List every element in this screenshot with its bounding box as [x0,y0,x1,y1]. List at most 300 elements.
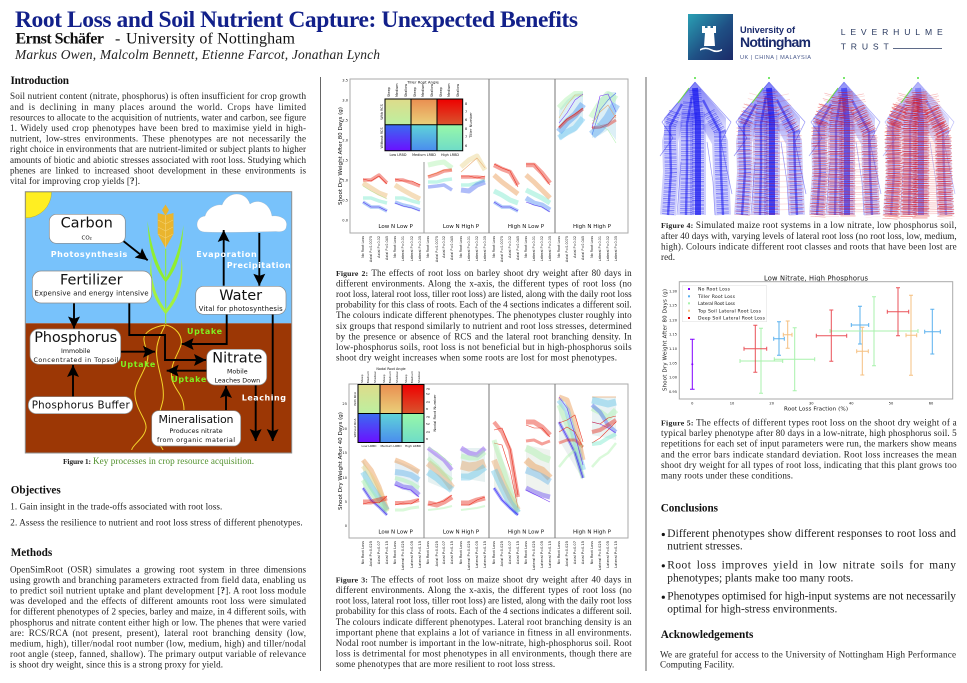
inset heat map: tiller root angle by LRBD and RCS [380,80,473,157]
caption: figure 2: Figure 2: The effects of root loss on barley shoot dry weight after 80 days in [336,268,632,278]
process labels: Evaporation [196,250,257,259]
title: Root Loss and Soil Nutrient Capture: Unexpected Benefits [15,7,578,33]
legend: Top Soil Lateral Root Loss [697,308,762,314]
y axis: 0.5 [342,198,348,202]
caption: figure 4: red. [661,252,675,262]
caption: figure 4: after 40 days with, varying levels of lateral root loss (no root loss, low, medium, [661,231,957,241]
x axis labels: Axial P=0.0075 [500,236,504,262]
box: fertilizer: Expensive and energy intensive [34,290,148,298]
heat map labels: 6 [465,118,467,122]
y axis [669,289,678,394]
x axis labels: Axial P=0.0075 [369,236,373,262]
caption: figure 4: Figure 4: Simulated maize root systems in a low nitrate, low phosphorus soil, [661,220,957,230]
caption: figure 2: The colours indicate different phenotypes. The phenotypes cluster roughly into [336,310,632,320]
process labels: Photosynthesis [51,250,128,259]
error bars: top soil lateral root loss [783,295,917,375]
x axis labels: No Root Loss [524,236,528,258]
box: mineralisation: Mineralisation [158,413,234,426]
caption: figure 5: and the error bars indicate standard deviation. Root loss increases the mean [661,449,957,459]
y axis [342,78,349,222]
box: nitrate [207,349,267,385]
box: phosphorus: Concentrated in Topsoil [34,357,119,364]
text block: methods: OpenSimRoot (OSR) simulates a growing root system in three dimensions [10,564,306,574]
caption: figure 3: Figure 3: The effects of root loss on maize shoot dry weight after 40 days in [336,574,632,584]
x axis labels: Axial P=0.025 [565,541,569,566]
x axis labels: Axial P=0.025 [500,541,504,566]
legend: Lateral Root Loss [698,301,736,307]
heat map labels: Medium [395,83,399,97]
section labels: Low N High P [443,224,480,230]
caption: figure 3: loss is detrimental for most phenotypes in all environments, though there are [336,649,632,659]
text block: methods [10,564,306,670]
text block: introduction: vital for improving crop yields [?]. [10,176,140,186]
box: carbon: Carbon [61,216,113,232]
y axis: 1.10 [669,347,678,351]
y axis: 2.5 [342,118,348,122]
heat map labels: Low LRBD [362,444,377,448]
x axis labels: Axial P=0.15 [450,541,454,564]
legend: Deep Soil Lateral Root Loss [698,316,766,322]
box: fertilizer: Fertilizer [60,272,123,288]
y axis: 1.5 [342,158,348,162]
caption: figure 5: repetitions for each set of input parameters were run, the markers show means [661,439,957,449]
roots [132,325,184,450]
x axis: 10 [730,402,735,406]
text block: methods: for different phenotypes of 2 species, barley and maize, in 4 different soils, with [10,607,306,617]
x axis labels: Axial P=0.045 [450,236,454,260]
x axis: 0 [691,402,694,406]
x axis labels: No Root Loss [426,236,430,258]
icon: wheat plant [148,204,184,324]
heat map labels: Medium [366,371,370,383]
y axis: 1.00 [669,376,678,380]
process labels: Uptake [187,327,223,336]
process labels: Precipitation [227,261,291,270]
figure 5: error bar chart [662,274,953,412]
y axis: 1.30 [669,289,678,293]
heat map labels: Shallow [456,84,460,97]
caption: figure 5: typical barley phenotype after 80 days in a low-nitrate, high phosphorus soil. 5 [661,428,957,438]
x axis labels: No Root Loss [590,236,594,258]
box: phosphorus buffer: Phosphorus Buffer [32,400,130,412]
text block: introduction: nutrient, low-stres environments. These phenotypes are not necessarily the [10,134,306,144]
x axis labels: Lateral P=0.025 [532,541,536,570]
x axis labels: Lateral P=0.01 [467,236,471,261]
section labels: High N High P [573,224,612,230]
y axis: 3.5 [342,78,348,82]
box: carbon: CO₂ [82,236,92,242]
section labels: High N Low P [508,224,545,230]
process labels: Uptake [171,375,207,384]
text block: introduction: 1. Widely used crop phenotypes have been bred to maximise yield in high- [10,123,306,133]
x axis labels: Axial P=0.15 [516,541,520,564]
root system: medium root loss [809,77,881,217]
list: conclusions: Different phenotypes show different responses to root loss and [667,528,956,540]
caption: figure 3: The colours indicate different phenotypes. Lateral root branching density is an [336,617,632,627]
heat map labels: Medium [421,83,425,97]
box: phosphorus [30,329,121,364]
box: water [196,286,286,314]
caption: figure 2: different environments. Along the x-axis, the different types of root loss (no [336,278,632,288]
x axis title: Root Loss Fraction (%) [784,406,848,412]
box: mineralisation [152,411,241,446]
caption: figure 2: root loss, lateral root loss, tiller root loss) are listed, along with the daily root loss [336,289,632,299]
author and affiliation: University of Nottingham [126,30,296,48]
box: water: Vital for photosynthesis [199,305,283,313]
y axis: 15 [342,451,347,455]
x axis labels: Lateral P=0.01 [598,236,602,261]
list: objectives [10,502,303,527]
heat map labels: Shallow [417,371,421,383]
x axis labels: No Root Loss [492,541,496,564]
y axis: 10 [342,476,348,480]
x axis: 50 [889,402,894,406]
x axis: 60 [929,402,934,406]
text block: introduction [10,91,306,186]
heat map labels: 8 [426,437,428,441]
heat map labels: Tiller Number [468,112,473,139]
logo: Leverhulme Trust [841,27,943,52]
heat map labels: Medium LRBD [412,153,436,157]
x axis labels: No Root Loss [361,236,365,258]
heat map labels [353,367,437,448]
icon: cloud [197,194,287,232]
heading: Conclusions: Conclusions [661,503,719,515]
y axis: 1.25 [669,304,677,308]
text block: introduction: resources to allocate to the acquisition of nutrients, water and carbon, see figure [10,112,306,122]
caption: figure 3: some phenotypes that are more resilient to root loss stress. [336,659,555,669]
caption: figure 2: shoot dry weight increases when some roots are lost for most phenotypes. [336,353,617,363]
x axis labels: Lateral P=0.05 [483,236,487,261]
x axis labels: Axial P=0.15 [581,541,585,564]
x axis labels [361,236,618,262]
logo: University of Nottingham: University of [740,25,796,35]
heat map labels: 6 [465,144,467,148]
x axis labels: Lateral P=0.025 [467,541,471,570]
heat map labels: 52 [426,392,430,396]
text block: acknowledgements: Computing Facility. [660,660,734,670]
heading: Acknowledgements: Acknowledgements [661,629,754,641]
text block: methods: using growth and branching parameters extracted from field data, enabling us [10,575,306,585]
text block: introduction: phenes are linked to increased shoot development in these environments is [10,165,306,175]
x axis labels: Axial P=0.02 [573,236,577,258]
box: nitrate: Mobile [227,368,248,376]
error bars: tiller root loss [774,306,940,355]
x axis labels: Lateral P=0.15 [614,541,618,568]
heat map labels: Medium [447,83,451,97]
heat map labels: Medium LRBD [380,444,402,448]
y axis title: Shoot Dry Weight After 40 Days (g) [338,412,344,510]
text block: introduction: and is declining in many places around the world. Crops have limited [10,102,306,112]
x axis labels: Lateral P=0.05 [418,236,422,261]
heat map labels: Medium [410,371,414,383]
heat map labels: Nodal Root Number [432,394,437,432]
caption: figure 2 [336,268,632,363]
x axis labels: Axial P=0.02 [442,236,446,258]
x axis labels: Axial P=0.0075 [435,236,439,262]
caption: figure 2: low-phosphorus soils, root loss is not beneficial but in high-phosphorus soils [336,342,632,352]
heat map labels: 24 [426,430,430,434]
x axis labels: No Root Loss [557,236,561,258]
caption: figure 4 [661,220,957,262]
list: conclusions: Root loss improves yield in low nitrate soils for many [667,559,956,571]
y axis title: Shoot Dry Weight After 80 Days (g) [662,289,668,391]
plot frame [350,79,628,233]
text block: acknowledgements: We are grateful for access to the University of Nottingham High Performance [660,649,956,659]
box: carbon [49,214,125,243]
heat map labels: Shallow [373,371,377,383]
text block: introduction: Soil nutrient content (nitrate, phosphorus) is often insufficient for crop growth [10,91,306,101]
heat map labels: 7 [465,110,467,114]
y axis: 5 [345,500,347,504]
x axis labels: Axial P=0.045 [516,236,520,260]
y axis: 2.0 [342,138,349,142]
heat map labels: 8 [465,127,467,131]
heat map labels: Shallow [404,84,408,97]
heat map labels: Steep [382,374,386,383]
x axis labels: No Root Loss [459,236,463,258]
text block: methods: phosphorus and nitrate content either high or low. The phenes that were varied [10,617,306,627]
x axis [691,402,934,406]
y axis: 1.0 [342,178,349,182]
box: phosphorus: Immobile [61,348,90,355]
x axis labels: Lateral P=0.15 [483,541,487,568]
logo: University of Nottingham: Nottingham [740,34,811,50]
error bars: no root loss [690,339,695,389]
list: conclusions [662,528,956,615]
y axis: 1.20 [669,318,678,322]
x axis labels: No Root Loss [393,541,397,564]
heading: Methods: Methods [11,547,53,559]
y axis: 20 [342,427,348,431]
caption: figure 2: six groups that respond similarly to nutrient and root loss stresses, determined [336,321,632,331]
y axis [342,402,348,528]
x axis labels: Lateral P=0.05 [614,236,618,261]
x axis labels: No Root Loss [393,236,397,258]
y axis: 0.0 [342,218,349,222]
figure 4: simulated maize root systems [660,77,955,219]
section labels: Low N Low P [378,224,413,230]
heat map labels: High LRBD [405,444,422,448]
box: phosphorus: Phosphorus [34,330,117,346]
caption: figure 5 [661,418,957,480]
logo: Leverhulme Trust: TRUST [841,42,889,52]
caption: figure 3: Nodal root number is important in the low-nitrate, high-phosphorus soil. Root [336,638,632,648]
x axis labels: Lateral P=0.02 [410,236,414,261]
x axis labels: Lateral P=0.05 [475,541,479,568]
error bars: deep soil lateral root loss [744,288,909,372]
caption: figure 5: Figure 5: The effects of different types root loss on the shoot dry weight of a [661,418,957,428]
heat map labels: Shallow [395,371,399,383]
x axis labels: No Root Loss [361,541,365,564]
text block: methods: are: RCS/RCA (not present, present), lateral root branching density (low, [10,628,306,638]
root system: high root loss [883,77,955,219]
list: objectives: 2. Assess the resilience to nutrient and root loss stress of different phenotypes. [10,517,303,527]
text block: methods: was developed and the effects of different amounts root loss were simulated [10,596,306,606]
process labels: Uptake [120,360,156,369]
heat map labels: Without RCA [353,418,357,437]
heading: Introduction: Introduction [10,75,70,87]
x axis labels: Axial P=0.0075 [565,236,569,262]
section labels: Low N High P [443,530,480,536]
x axis labels: No Root Loss [492,236,496,258]
box: phosphorus buffer [28,397,133,414]
heat map labels [380,80,473,157]
x axis: 20 [769,402,775,406]
phenotype spread shading [363,397,616,515]
x axis labels: Lateral P=0.05 [410,541,414,568]
heat map labels: Steep [387,87,391,97]
y axis: 1.05 [669,361,677,365]
lines: low N high P [428,156,485,191]
heat map labels: 8 [426,407,428,411]
x axis labels: Axial P=0.045 [581,236,585,260]
heading: Objectives: Objectives [11,484,61,496]
soil [25,323,292,453]
caption: figure 3: different environments. Along the x-axis, the different types of root loss (no [336,585,632,595]
heat map labels: Low LRBD [390,153,407,157]
section labels: Low N Low P [378,530,413,536]
box: mineralisation: Produces nitrate [169,427,223,435]
caption: figure 3: probability for this class of roots. Each of the 4 sections indicates a different soil. [336,606,632,616]
caption: figure 3: root loss, lateral root loss, tiller root loss) are listed, along with the daily root loss [336,596,632,606]
x axis labels: Lateral P=0.05 [540,541,544,568]
list: objectives: 1. Gain insight in the trade-offs associated with root loss. [10,502,222,512]
text block: methods: root angle (steep, fanned, shallow). The primary output variable of relevance [10,649,306,659]
text block: methods: to predict soil nutrient uptake and plant development [?]. A root loss module [10,586,306,596]
x axis labels: Axial P=0.02 [377,236,381,258]
heat map labels: 24 [426,400,430,404]
heat map labels: With RCA [353,391,357,406]
text block: introduction: right choice in environments that are nutrient-limited or subject plants to higher [10,144,306,154]
lines: high N low P [494,422,550,515]
heat map labels: 70 [426,387,430,391]
heat map labels: Nodal Root Angle [376,367,406,371]
x axis labels: Lateral P=0.025 [598,541,602,570]
lines: high N low P [494,164,550,212]
icon: sun [26,192,52,218]
heat map labels: Tiller Root Angle [406,80,440,84]
heat map labels: With RCS [380,104,384,120]
x axis labels: Lateral P=0.01 [401,236,405,261]
heat map labels: 52 [426,422,430,426]
x axis labels: Axial P=0.07 [508,541,512,564]
logo: University of Nottingham [688,14,811,61]
y axis: 25 [342,402,347,406]
legend: No Root Loss [698,287,731,293]
heat map labels: 7 [465,135,467,139]
logo: University of Nottingham: UK | CHINA | MALAYSIA [740,55,811,61]
author and affiliation: Ernst Schäfer [16,30,104,48]
heat map labels: 70 [426,415,430,419]
heat map labels: Without RCS [380,127,384,149]
x axis labels: Lateral P=0.02 [606,236,610,261]
section labels: High N High P [573,530,612,536]
list: conclusions: phenotypes; plants make too many roots. [667,572,853,584]
lines: low N low P [363,460,419,515]
root system: no root loss [660,77,732,215]
heat map labels: Steep [413,87,417,97]
section labels [378,530,612,536]
text block: acknowledgements [660,649,956,670]
lines: high N high P [559,92,616,143]
x axis: 40 [849,402,854,406]
box: fertilizer [32,271,152,303]
error bars: lateral root loss [740,297,918,393]
x axis labels: Lateral P=0.15 [418,541,422,568]
heat map labels: Shallow [430,84,434,97]
plot frame [679,282,953,399]
y axis: 0 [345,524,348,528]
caption: figure 3 [336,574,632,669]
lines: low N high P [428,447,485,510]
lines: low N low P [363,175,420,211]
legend: Tiller Root Loss [697,294,736,300]
figure 3: maize shoot dry weight chart [338,367,628,570]
y axis: 3.0 [342,98,349,102]
box: water: Water [219,288,262,304]
section labels [378,224,612,230]
caption: figure 4: high). Colours indicate different root classes and roots that have been lost are [661,241,957,251]
x axis labels: Lateral P=0.02 [475,236,479,261]
x axis labels: No Root Loss [459,541,463,564]
heat map labels: Steep [439,87,443,97]
x axis labels: Axial P=0.025 [369,541,373,566]
logo: Leverhulme Trust: LEVERHULME [841,27,943,37]
heat map labels: High LRBD [441,153,459,157]
text block: methods: is shoot dry weight, since this is a strong proxy for yield. [10,660,223,670]
text block: introduction: amounts of biotic and abiotic stresses associated with root loss. Studying which [10,155,306,165]
figure 1: crop resource acquisition diagram [25,192,292,453]
caption: figure 1: Figure 1: [63,457,91,466]
box: nitrate: Nitrate [212,350,262,366]
x axis labels: Axial P=0.025 [435,541,439,566]
root system: low root loss [734,77,806,215]
box: mineralisation: from organic material [157,436,235,444]
arrows [73,230,273,441]
x axis labels: Lateral P=0.05 [606,541,610,568]
co-authors: Markus Owen, Malcolm Bennett, Etienne Farcot, Jonathan Lynch [14,47,380,62]
list: conclusions: optimal for high-stress environments. [667,603,837,615]
y axis: 0.95 [669,390,677,394]
x axis labels: Axial P=0.045 [385,236,389,260]
caption: figure 2: by the presence or absence of RCS and the lateral root branching density. In [336,331,632,341]
y axis title: Shoot Dry Weight After 80 Days (g) [338,107,344,205]
caption: figure 2: probability for this class of roots. Each of the 4 sections indicates a different soil. [336,300,632,310]
heat map labels: Steep [360,374,364,383]
x axis labels: No Root Loss [524,541,528,564]
plot frame [349,384,628,538]
sky [25,192,292,323]
inset heat map: nodal root angle by LRBD and RCA [353,367,437,448]
box: nitrate: Leaches Down [215,378,260,384]
x axis labels: No Root Loss [426,541,430,564]
process labels [51,250,291,402]
x axis labels: Axial P=0.07 [573,541,577,564]
heat map labels: 8 [465,102,467,106]
section labels: High N Low P [508,530,545,536]
caption: figure 5: many roots under these conditions. [661,470,793,480]
list: conclusions: Phenotypes optimised for high-input systems are not necessarily [667,591,956,603]
x axis labels: Lateral P=0.02 [540,236,544,261]
heat map labels: Medium [388,371,392,383]
figure 2: barley shoot dry weight chart [338,78,628,262]
x axis labels: No Root Loss [590,541,594,564]
text block: methods: medium, high), tiller/nodal root number (low, medium, high) and tiller/nodal [10,638,306,648]
legend [682,286,767,322]
x axis labels: Axial P=0.07 [377,541,381,564]
chart title: Low Nitrate, High Phosphorus [764,274,869,282]
